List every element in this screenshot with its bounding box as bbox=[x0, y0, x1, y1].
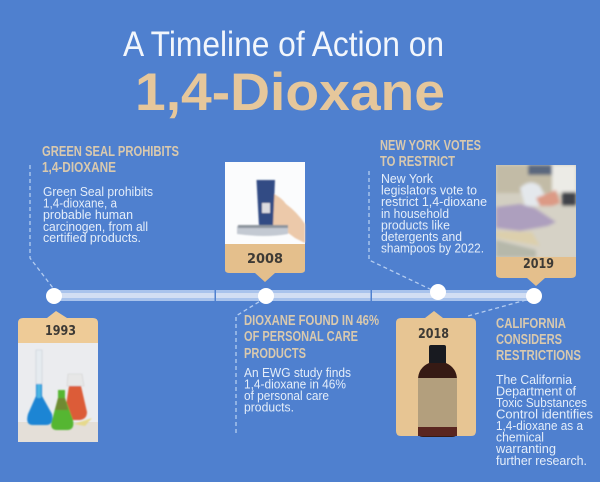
text block: Dioxane found: products. bbox=[244, 400, 294, 414]
text block: California: Toxic Substances bbox=[496, 395, 587, 410]
text block: New York: detergents and bbox=[381, 229, 462, 244]
text block: New York: New York bbox=[381, 171, 434, 186]
connector: 1993 bbox=[30, 165, 53, 288]
marker: 2008 bbox=[258, 288, 274, 304]
text block: Green Seal: Green Seal prohibits bbox=[43, 184, 153, 199]
marker: 2018 bbox=[430, 284, 446, 300]
connector: 2008 bbox=[236, 300, 262, 433]
title: 1,4-Dioxane bbox=[135, 63, 445, 122]
text block: Green Seal: 1,4-DIOXANE bbox=[42, 160, 116, 176]
year: 2019: 2019 bbox=[523, 256, 554, 272]
year: 2008: 2008 bbox=[247, 251, 283, 267]
text block: California: CONSIDERS bbox=[496, 332, 562, 348]
text block: Green Seal: carcinogen, from all bbox=[43, 219, 148, 234]
text block: Dioxane found bbox=[244, 313, 379, 414]
text block: California: CALIFORNIA bbox=[496, 316, 566, 332]
text block: California: 1,4-dioxane as a bbox=[496, 418, 584, 433]
text block: California: chemical bbox=[496, 430, 544, 444]
text block: Green Seal: certified products. bbox=[43, 230, 141, 245]
text block: California: Control identifies bbox=[496, 406, 593, 422]
connector: 2018 bbox=[369, 171, 432, 290]
text block: California: Department of bbox=[496, 384, 576, 398]
text block: California: The California bbox=[496, 372, 573, 387]
text block: New York: legislators vote to bbox=[381, 182, 477, 198]
text block: Green Seal bbox=[42, 144, 179, 245]
card: 2008 bbox=[225, 162, 305, 282]
text block: New York bbox=[380, 138, 487, 256]
text block: New York: shampoos by 2022. bbox=[381, 240, 484, 256]
year: 1993: 1993 bbox=[45, 323, 76, 339]
text block: New York: products like bbox=[381, 218, 450, 232]
text block: Green Seal: 1,4-dioxane, a bbox=[43, 196, 118, 210]
text block: Green Seal: probable human bbox=[43, 207, 133, 222]
card: 1993 bbox=[18, 311, 98, 442]
text block: Dioxane found: OF PERSONAL CARE bbox=[244, 329, 358, 345]
connector: 2019 bbox=[468, 300, 526, 316]
text block: California bbox=[495, 316, 593, 468]
image: flasks bbox=[18, 343, 98, 442]
text block: New York: TO RESTRICT bbox=[380, 154, 455, 170]
year: 2018: 2018 bbox=[418, 326, 449, 342]
title bbox=[123, 25, 445, 122]
text block: Dioxane found: An EWG study finds bbox=[244, 365, 351, 380]
image: hand holding tube bbox=[237, 180, 305, 243]
text block: New York: restrict 1,4-dioxane bbox=[381, 194, 487, 209]
text block: California: warranting bbox=[495, 441, 556, 456]
text block: Dioxane found: PRODUCTS bbox=[244, 346, 306, 362]
text block: Green Seal: GREEN SEAL PROHIBITS bbox=[42, 144, 179, 160]
text block: New York: in household bbox=[381, 206, 449, 221]
title: A Timeline of Action on bbox=[123, 25, 444, 64]
text block: New York: NEW YORK VOTES bbox=[380, 138, 481, 154]
marker: 1993 bbox=[46, 288, 62, 304]
marker: 2019 bbox=[526, 288, 542, 304]
text block: California: further research. bbox=[496, 453, 587, 468]
card: 2018 bbox=[396, 311, 476, 437]
image: gloved hand in lab bbox=[496, 165, 576, 257]
text block: Dioxane found: 1,4-dioxane in 46% bbox=[244, 376, 346, 392]
text block: Dioxane found: of personal care bbox=[244, 388, 329, 403]
text block: Dioxane found: DIOXANE FOUND IN 46% bbox=[244, 313, 379, 329]
card: 2019 bbox=[496, 165, 576, 286]
timeline bar bbox=[54, 289, 534, 302]
image: amber bottle bbox=[418, 345, 457, 437]
